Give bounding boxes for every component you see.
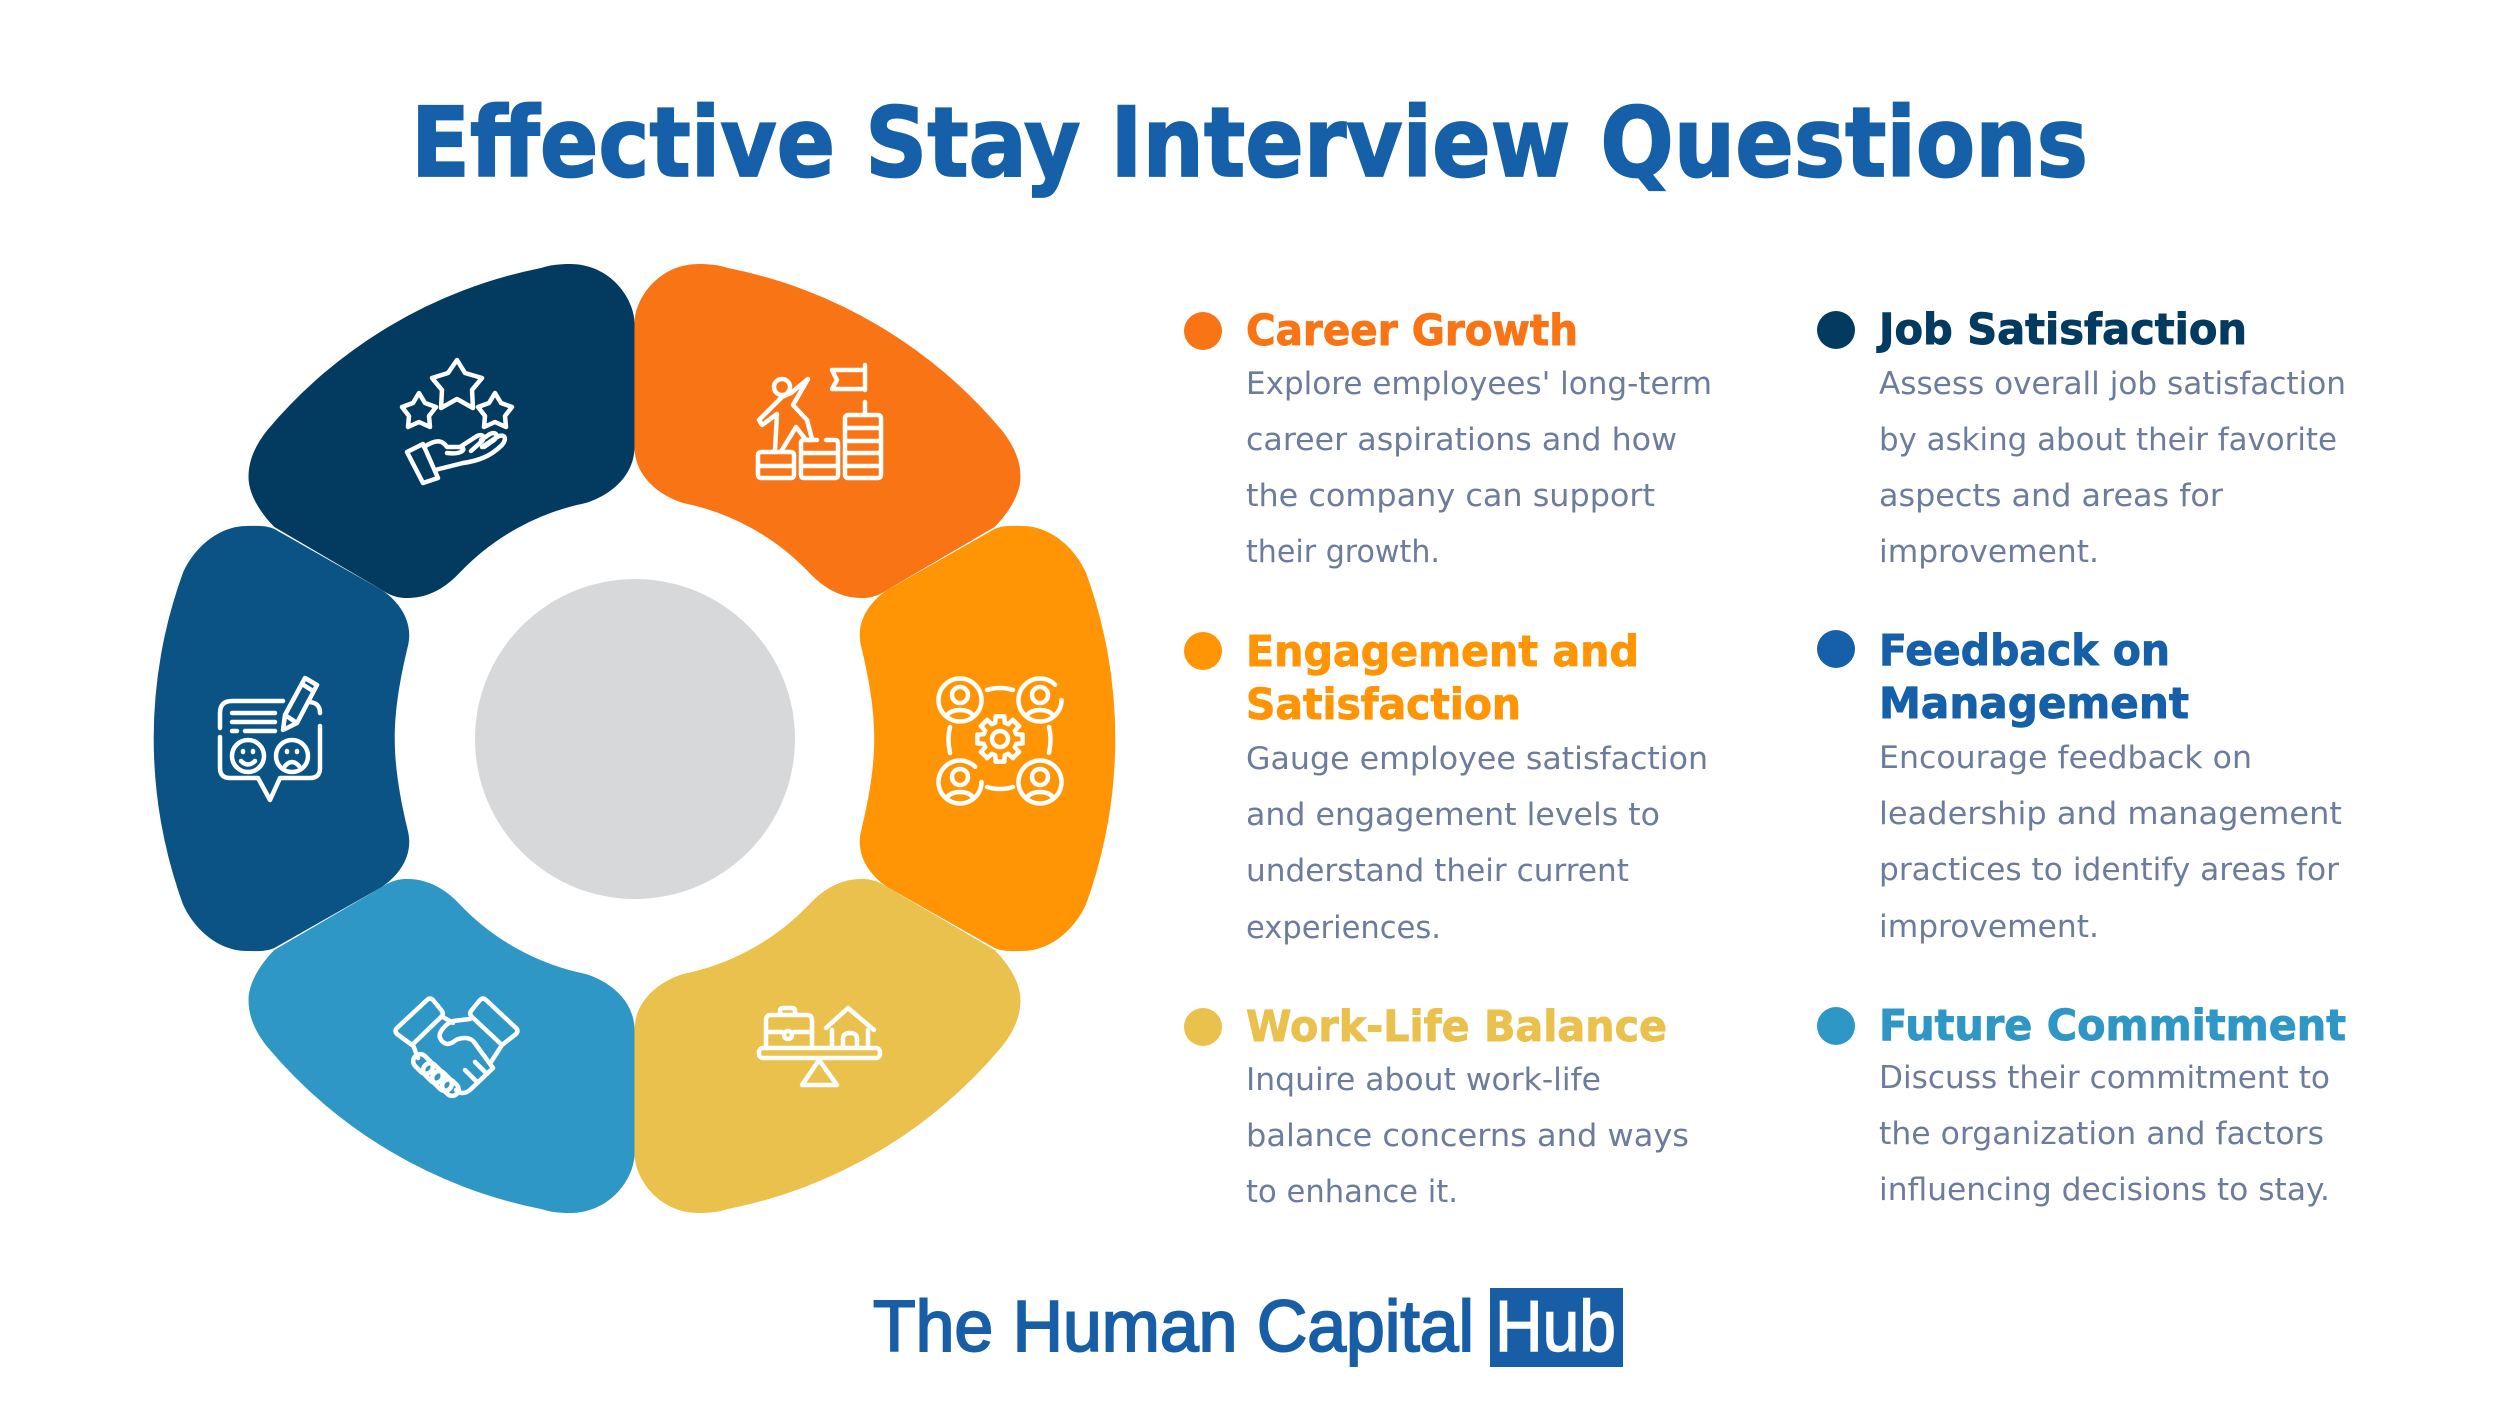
heading — [1879, 626, 2189, 729]
description: experiences. — [1246, 910, 1441, 946]
description: Encourage feedback on — [1879, 740, 2252, 776]
description: improvement. — [1879, 909, 2099, 945]
segment: work-life balance (yellow) — [634, 879, 1020, 1213]
description: the organization and factors — [1879, 1116, 2324, 1152]
icon: feedback bubble with faces — [220, 678, 320, 800]
description: Inquire about work-life — [1246, 1062, 1601, 1098]
bullet — [1817, 1007, 1855, 1045]
item: career growth — [1184, 306, 1712, 570]
description: aspects and areas for — [1879, 478, 2223, 514]
description: practices to identify areas for — [1879, 852, 2339, 888]
description — [1879, 1060, 2330, 1208]
description: the company can support — [1246, 478, 1655, 514]
donut diagram — [154, 264, 1115, 1213]
description — [1246, 1062, 1689, 1210]
description: by asking about their favorite — [1879, 422, 2337, 458]
heading: Career Growth — [1246, 306, 1578, 356]
segment: engagement and satisfaction (amber) — [860, 526, 1115, 951]
description: balance concerns and ways — [1246, 1118, 1689, 1154]
description: and engagement levels to — [1246, 797, 1660, 833]
heading: Engagement and — [1246, 627, 1639, 677]
description: Discuss their commitment to — [1879, 1060, 2330, 1096]
segment: job satisfaction (navy) — [249, 264, 634, 598]
center circle — [475, 579, 795, 899]
item: work-life balance — [1184, 1002, 1689, 1210]
description: improvement. — [1879, 534, 2099, 570]
heading: Feedback on — [1879, 626, 2170, 676]
item: future commitment — [1817, 1001, 2346, 1208]
heading — [1246, 627, 1639, 730]
title: Effective Stay Interview Questions — [411, 87, 2088, 199]
bullet — [1184, 632, 1222, 670]
icon: climbing steps and flag — [758, 365, 881, 478]
description: career aspirations and how — [1246, 422, 1677, 458]
logo wordmark: The Human Capital — [873, 1287, 1474, 1367]
heading: Satisfaction — [1246, 680, 1521, 730]
description: Gauge employee satisfaction — [1246, 741, 1708, 777]
description: Assess overall job satisfaction — [1879, 366, 2346, 402]
heading: Work-Life Balance — [1246, 1002, 1667, 1052]
segment: career growth (orange) — [634, 264, 1020, 598]
heading: Management — [1879, 679, 2189, 729]
heading: Job Satisfaction — [1876, 305, 2247, 355]
icon: handshake — [396, 998, 518, 1099]
icon: work and home on a balance — [759, 1008, 880, 1085]
bullet — [1184, 312, 1222, 350]
description — [1879, 366, 2346, 570]
description — [1246, 741, 1708, 946]
logo box — [1490, 1288, 1623, 1367]
description: Explore employees' long-term — [1246, 366, 1712, 402]
description: influencing decisions to stay. — [1879, 1172, 2330, 1208]
bullet — [1184, 1008, 1222, 1046]
heading: Future Commitment — [1879, 1001, 2346, 1051]
icon: stars over hand — [402, 360, 512, 483]
logo box text: Hub — [1495, 1287, 1616, 1367]
segment: future commitment (light blue) — [249, 879, 634, 1213]
description — [1246, 366, 1712, 570]
description — [1879, 740, 2342, 945]
description: their growth. — [1246, 534, 1440, 570]
icon: people around a gear — [938, 678, 1062, 804]
bullet — [1817, 630, 1855, 668]
description: to enhance it. — [1246, 1174, 1458, 1210]
description: leadership and management — [1879, 796, 2342, 832]
item: job satisfaction — [1817, 305, 2346, 570]
logo: The Human Capital Hub — [873, 1287, 1623, 1367]
item: feedback on management — [1817, 626, 2342, 945]
item: engagement and satisfaction — [1184, 627, 1708, 946]
description: understand their current — [1246, 853, 1629, 889]
segment: feedback on management (dark blue) — [154, 526, 409, 951]
bullet — [1817, 311, 1855, 349]
